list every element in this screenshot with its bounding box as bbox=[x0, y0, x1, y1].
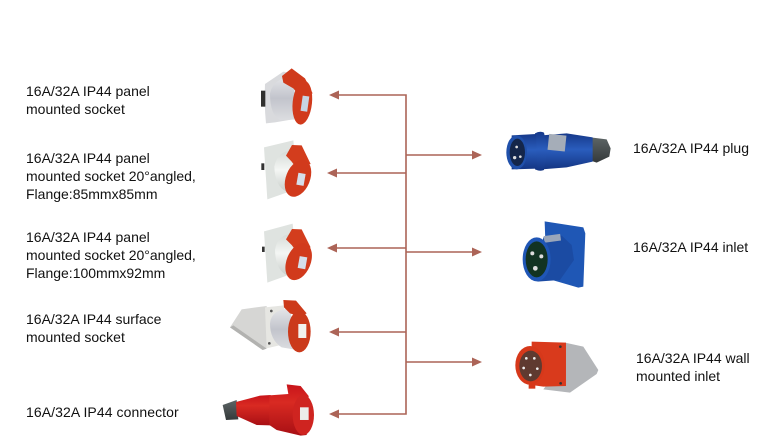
text: 100mm angled socket label bbox=[26, 229, 196, 281]
text: surface mounted socket label: mounted socket bbox=[26, 329, 125, 345]
icon: connector bbox=[223, 384, 314, 436]
text: wall mounted inlet label: mounted inlet bbox=[636, 368, 720, 384]
arrows: connector tree bbox=[327, 90, 482, 418]
text: panel mounted socket label: mounted socket bbox=[26, 101, 125, 117]
icon: inlet bbox=[523, 221, 585, 288]
icon: surface mounted socket bbox=[230, 300, 311, 352]
text: plug label: 16A/32A IP44 plug bbox=[633, 140, 749, 156]
text: wall mounted inlet label bbox=[636, 350, 750, 384]
text: 85mm angled socket label bbox=[26, 150, 196, 202]
text: inlet label: 16A/32A IP44 inlet bbox=[633, 239, 748, 255]
text: panel mounted socket label bbox=[26, 83, 150, 117]
icon: wall mounted inlet bbox=[515, 342, 598, 393]
text: 85mm angled socket label: 16A/32A IP44 panel bbox=[26, 150, 150, 166]
text: 100mm angled socket label: Flange:100mmx92mm bbox=[26, 265, 165, 281]
text: surface mounted socket label bbox=[26, 311, 161, 345]
text: 100mm angled socket label: 16A/32A IP44 panel bbox=[26, 229, 150, 245]
icon: angled socket 85mm bbox=[261, 140, 316, 201]
text: panel mounted socket label: 16A/32A IP44 panel bbox=[26, 83, 150, 99]
icon: panel mounted socket bbox=[261, 68, 314, 126]
text: 85mm angled socket label: Flange:85mmx85mm bbox=[26, 186, 158, 202]
text: 100mm angled socket label: mounted socket 20°angled, bbox=[26, 247, 196, 263]
text: 85mm angled socket label: mounted socket 20°angled, bbox=[26, 168, 196, 184]
text: wall mounted inlet label: 16A/32A IP44 wall bbox=[636, 350, 750, 366]
icon: angled socket 100mm bbox=[262, 224, 317, 284]
text: surface mounted socket label: 16A/32A IP44 surface bbox=[26, 311, 161, 327]
icon: plug bbox=[506, 132, 611, 171]
text: connector label: 16A/32A IP44 connector bbox=[26, 404, 179, 420]
